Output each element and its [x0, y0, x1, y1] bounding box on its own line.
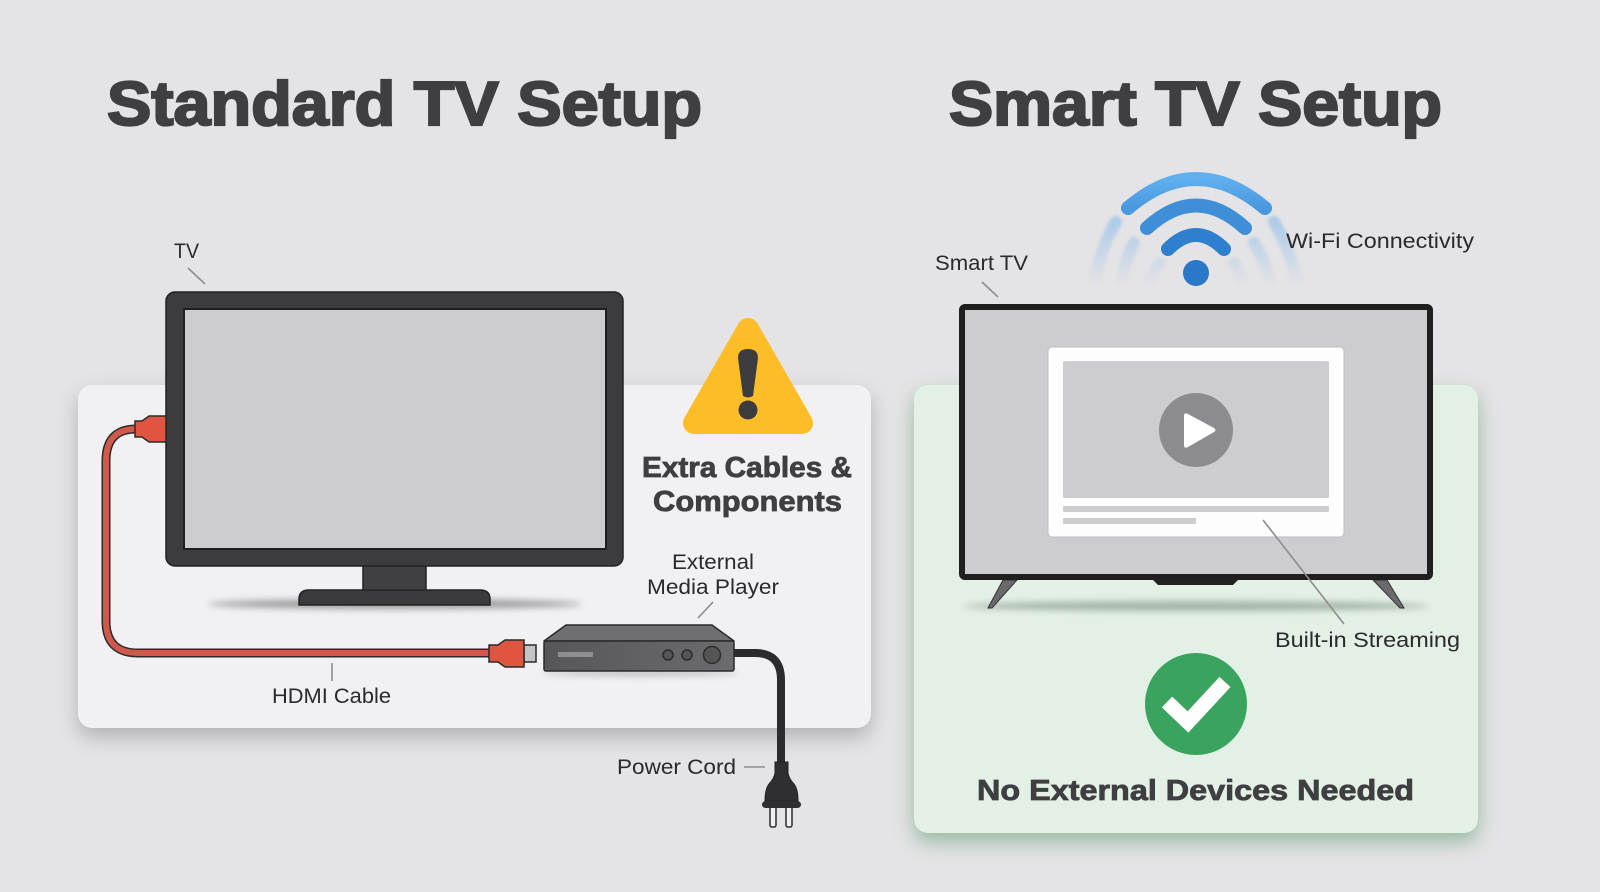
label: External Media Player: External — [672, 551, 754, 574]
label: TV: TV — [174, 240, 199, 263]
inner arc — [1168, 235, 1224, 249]
label: Wi-Fi Connectivity: Wi-Fi Connectivity — [1286, 230, 1475, 253]
icon: external media player — [542, 625, 738, 676]
video area — [1063, 361, 1329, 498]
icon: wifi — [1095, 179, 1297, 286]
label: Smart TV: Smart TV — [935, 252, 1028, 275]
label: External Media Player: Media Player — [647, 576, 779, 599]
HDMI cable — [106, 416, 536, 667]
callout: extra cables: Extra Cables & — [642, 452, 852, 484]
icon: standard TV — [166, 292, 623, 609]
dot — [1183, 260, 1209, 286]
label: Smart TV — [935, 252, 1028, 297]
label: Built-in Streaming — [1263, 520, 1460, 652]
callout: extra cables — [642, 452, 852, 518]
faded signal arcs — [1095, 222, 1297, 284]
heading: Smart TV Setup: Smart TV Setup — [949, 70, 1442, 139]
label: HDMI Cable — [272, 663, 391, 708]
icon: smart TV — [962, 307, 1430, 611]
label: External Media Player — [647, 551, 779, 618]
TV shadow — [208, 599, 582, 609]
label: TV — [174, 240, 205, 284]
panel: smart setup card — [914, 385, 1478, 842]
text line — [1063, 506, 1329, 512]
panel: standard setup card — [78, 385, 871, 737]
label: Built-in Streaming: Built-in Streaming — [1275, 629, 1460, 652]
icon: green check — [1145, 653, 1247, 755]
HDMI connector at TV — [135, 416, 166, 442]
icon: warning triangle — [694, 329, 802, 423]
TV bezel — [166, 292, 623, 566]
power plug — [762, 762, 801, 827]
smart TV shadow — [964, 601, 1428, 611]
heading: Standard TV Setup: Standard TV Setup — [107, 70, 702, 139]
smart TV feet — [988, 580, 1404, 608]
label: Power Cord: Power Cord — [617, 756, 736, 779]
TV stand — [299, 565, 490, 605]
callout: no external devices: No External Devices Needed — [977, 775, 1414, 807]
play button — [1159, 393, 1233, 467]
HDMI connector at player — [489, 640, 536, 667]
smart TV frame — [962, 307, 1430, 577]
outer arc — [1128, 179, 1265, 208]
TV screen — [184, 309, 606, 549]
text line short — [1063, 518, 1196, 524]
power cord — [733, 653, 801, 827]
middle arc — [1147, 206, 1245, 228]
label: HDMI Cable: HDMI Cable — [272, 685, 391, 708]
callout: extra cables: Components — [653, 486, 842, 518]
streaming card — [1048, 347, 1344, 537]
